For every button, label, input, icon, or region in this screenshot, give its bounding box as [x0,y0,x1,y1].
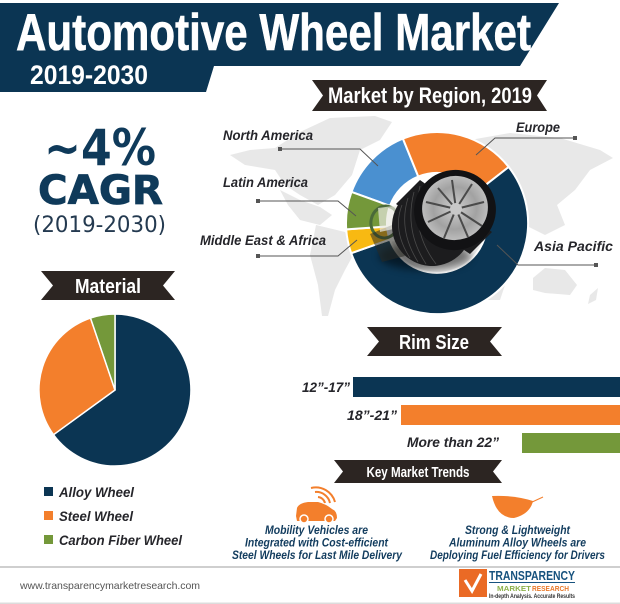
segment: asia pacific [351,167,528,314]
world map background [230,116,613,316]
heading: market by region [312,80,547,111]
donut chart: market by region [346,132,528,314]
label: middle east and africa [200,233,357,258]
website url: www.transparencymarketresearch.com [19,580,200,592]
year range: 2019-2030 [30,60,148,90]
trend text: mobility vehicles: Steel Wheels for Last Mile Delivery [232,548,403,562]
bar: more than 22: More than 22” [407,435,499,450]
CAGR callout [33,119,166,238]
pie chart: material [39,314,191,466]
segment: middle east and africa [346,226,390,253]
label: asia pacific: Asia Pacific [533,239,614,254]
CAGR callout: CAGR [38,168,163,214]
icon: connected car [296,487,337,523]
trend text: mobility vehicles: Mobility Vehicles are [265,523,368,537]
label: latin america [223,175,356,216]
label: europe [476,120,577,155]
segment: europe [403,132,509,192]
heading: key market trends: Key Market Trends [366,465,470,481]
heading: material: Material [75,276,141,298]
label: north america: North America [223,128,313,143]
icon: feather [492,496,543,518]
slice: steel wheel [39,318,115,435]
bar: more than 22 [407,433,620,453]
trend text: mobility vehicles: Integrated with Cost-efficient [245,536,389,550]
trend text: lightweight alloy wheels: Aluminum Alloy Wheels are [448,536,586,550]
segment: latin america [346,192,390,229]
icon: stacked tires [368,159,506,276]
label: latin america: Latin America [223,175,308,190]
heading: rim size [367,327,502,356]
heading: market by region: Market by Region, 2019 [328,83,532,108]
trend text: lightweight alloy wheels [430,523,605,562]
bar chart: rim size [302,377,620,453]
heading: key market trends [334,460,502,483]
heading: material [41,271,175,300]
bar: 12-17 [302,377,620,397]
trend text: mobility vehicles [232,523,403,562]
legend: material [44,484,183,548]
label: middle east and africa: Middle East & Africa [200,233,326,248]
legend: material: Carbon Fiber Wheel [59,532,183,548]
legend: material: Steel Wheel [59,508,134,524]
bar: 12-17: 12”-17” [302,380,350,395]
segment: north america [352,139,418,206]
title banner [0,3,559,92]
logo: transparency market research: RESEARCH [532,584,569,593]
logo: transparency market research: MARKET [497,584,531,593]
label: europe: Europe [516,120,560,135]
CAGR callout: (2019-2030) [33,213,166,238]
logo: transparency market research: TRANSPARENCY [489,568,575,583]
trend text: lightweight alloy wheels: Strong & Lightweight [465,523,571,537]
logo: transparency market research [459,568,576,600]
CAGR callout: ~4% [44,119,156,177]
heading: rim size: Rim Size [399,332,469,354]
logo: transparency market research: In-depth Analysis. Accurate Results [489,594,576,600]
label: north america [223,128,378,166]
legend: material: Alloy Wheel [58,484,135,500]
bar: 18-21 [347,405,620,425]
bar: 18-21: 18”-21” [347,408,397,423]
slice: carbon fiber wheel [90,314,115,390]
slice: alloy wheel [54,314,191,466]
label: asia pacific [497,239,614,267]
